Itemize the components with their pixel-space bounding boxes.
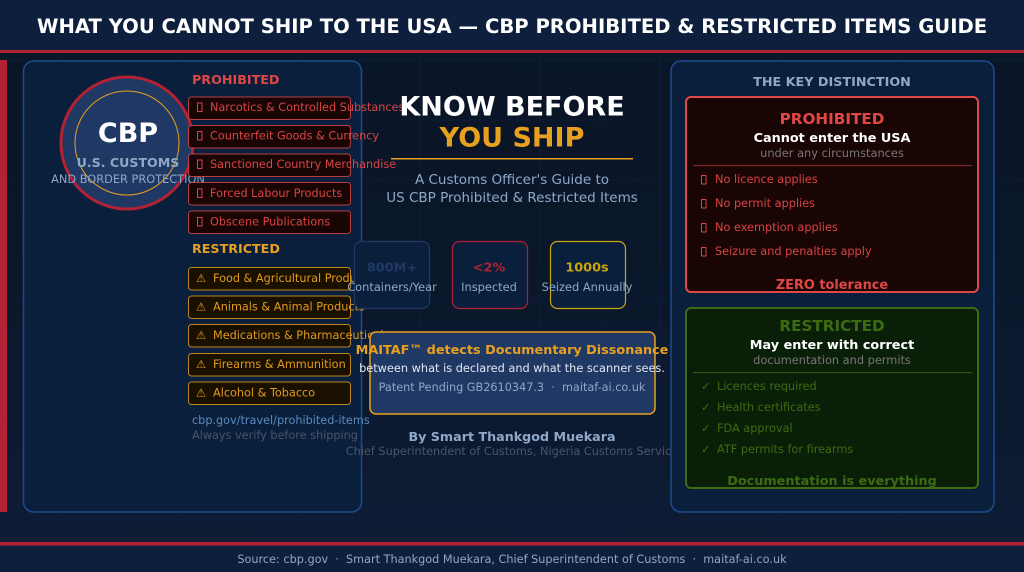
prohibited heading: PROHIBITED — [192, 72, 279, 87]
stat: containers — [347, 242, 437, 308]
restricted list: Food & Agricultural Products — [213, 272, 373, 285]
restricted list: ⚠ — [196, 358, 206, 371]
stat: containers: 800M+ — [367, 260, 417, 276]
prohibited list: Narcotics & Controlled Substances — [210, 101, 405, 114]
panel: key distinction — [671, 61, 994, 512]
stat: inspected — [452, 242, 528, 308]
card: restricted: RESTRICTED — [779, 317, 885, 335]
callout: MAITAF: MAITAF™ detects Documentary Dissonance — [356, 343, 669, 358]
subtitle — [386, 172, 638, 206]
card: restricted: Licences required — [717, 380, 817, 393]
card: prohibited: PROHIBITED — [780, 110, 884, 128]
restricted list: Medications & Pharmaceuticals — [213, 329, 389, 342]
centre heading — [391, 92, 633, 160]
CBP seal: U.S. CUSTOMS — [77, 155, 179, 170]
stat: inspected: <2% — [473, 260, 505, 276]
left accent bar — [0, 60, 7, 512]
restricted list: ⚠ — [196, 272, 206, 285]
CBP seal: CBP — [98, 118, 158, 149]
card: restricted: ✓ — [701, 422, 710, 435]
title: WHAT YOU CANNOT SHIP TO THE USA — CBP PROHIBITED & RESTRICTED ITEMS GUIDE — [37, 15, 987, 38]
prohibited list: Counterfeit Goods & Currency — [210, 130, 379, 142]
card: restricted: Health certificates — [717, 401, 821, 414]
restricted list: Alcohol & Tobacco — [213, 386, 315, 400]
card: restricted: FDA approval — [717, 422, 793, 435]
callout: MAITAF — [356, 332, 669, 414]
restricted list: Firearms & Ammunition — [213, 358, 346, 371]
card: prohibited: No permit applies — [715, 197, 815, 210]
restricted heading: RESTRICTED — [192, 241, 280, 256]
card: restricted — [686, 308, 978, 489]
prohibited list: Sanctioned Country Merchandise — [210, 158, 396, 171]
card: restricted: ATF permits for firearms — [717, 443, 853, 456]
prohibited list: Forced Labour Products — [210, 187, 342, 200]
author role: Chief Superintendent of Customs, Nigeria Customs Service — [346, 445, 678, 458]
prohibited list — [188, 97, 405, 234]
restricted list: ⚠ — [196, 329, 206, 342]
card: prohibited — [686, 97, 978, 293]
verify note: Always verify before shipping — [192, 429, 358, 442]
stat: seized: 1000s — [565, 260, 609, 276]
stat: seized — [542, 242, 633, 308]
card: restricted: ✓ — [701, 443, 710, 456]
card: prohibited: Seizure and penalties apply — [715, 245, 872, 258]
restricted list: ⚠ — [196, 386, 206, 400]
card: prohibited: Cannot enter the USA — [754, 131, 911, 146]
card: prohibited: under any circumstances — [760, 146, 904, 160]
footer — [0, 542, 1024, 572]
prohibited list: Obscene Publications — [210, 216, 330, 228]
restricted list — [188, 268, 389, 404]
source link: cbp.gov/travel/prohibited-items — [192, 414, 370, 427]
card: restricted: May enter with correct — [750, 338, 914, 353]
subtitle: US CBP Prohibited & Restricted Items — [386, 190, 638, 206]
callout: MAITAF: Patent Pending GB2610347.3 · maitaf-ai.co.uk — [379, 381, 646, 394]
subtitle: A Customs Officer's Guide to — [415, 172, 609, 188]
centre heading: KNOW BEFORE — [399, 92, 625, 122]
callout: MAITAF: between what is declared and what the scanner sees. — [359, 361, 665, 375]
restricted list: Animals & Animal Products — [213, 300, 365, 314]
panel: left — [24, 61, 405, 512]
card: restricted: ✓ — [701, 401, 710, 414]
footer: Source: cbp.gov · Smart Thankgod Muekara, Chief Superintendent of Customs · maitaf-ai.co.uk — [237, 553, 787, 566]
restricted list: ⚠ — [196, 300, 206, 314]
header banner — [0, 0, 1024, 53]
CBP seal: AND BORDER PROTECTION — [51, 172, 205, 186]
card: restricted: documentation and permits — [753, 353, 911, 367]
author: By Smart Thankgod Muekara — [408, 429, 616, 444]
centre heading: YOU SHIP — [439, 122, 584, 154]
stat: containers: Containers/Year — [347, 280, 437, 294]
CBP seal — [51, 77, 205, 209]
card: restricted: ✓ — [701, 380, 710, 393]
panel heading: THE KEY DISTINCTION — [753, 75, 911, 90]
stat: seized: Seized Annually — [542, 280, 633, 294]
card: restricted: Documentation is everything — [727, 474, 937, 489]
card: prohibited: No exemption applies — [715, 221, 838, 234]
card: prohibited: ZERO tolerance — [776, 278, 888, 293]
card: prohibited: No licence applies — [715, 173, 818, 186]
stat: inspected: Inspected — [461, 280, 517, 294]
